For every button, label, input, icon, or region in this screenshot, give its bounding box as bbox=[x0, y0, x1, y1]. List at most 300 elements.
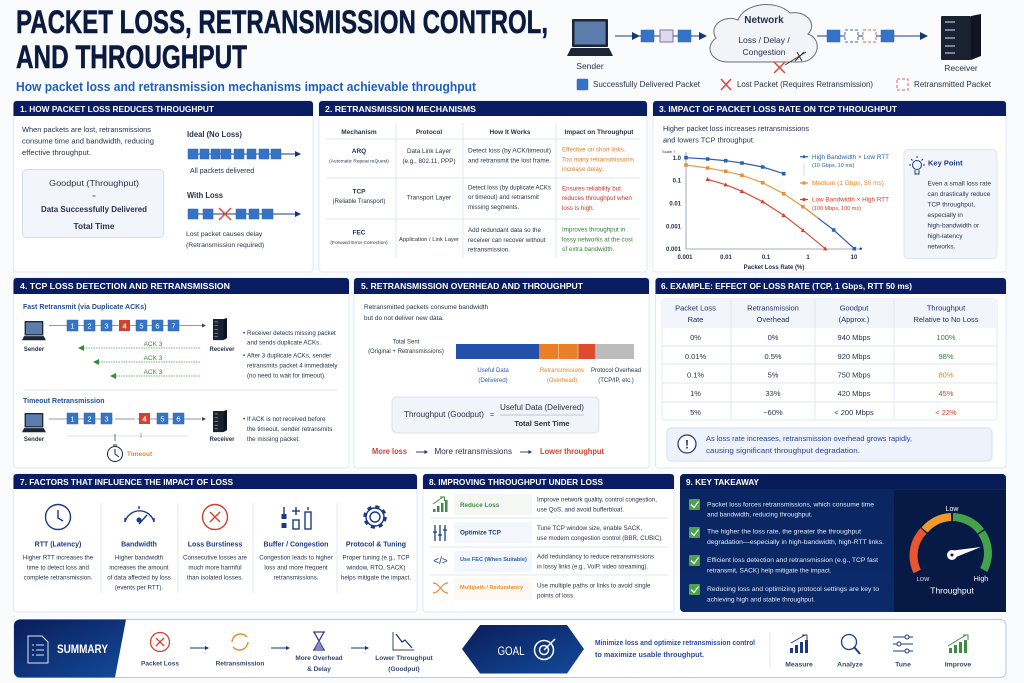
action: improve bbox=[945, 635, 971, 668]
table headers bbox=[341, 129, 634, 136]
title bbox=[16, 4, 548, 75]
icon: timeout clock bbox=[108, 445, 122, 462]
intro text bbox=[663, 126, 810, 144]
goal badge: GOAL bbox=[498, 644, 525, 658]
timeout notes: the missing packet. bbox=[247, 436, 300, 443]
legend: Lost Packet (Requires Retransmission) bbox=[737, 80, 873, 89]
fast retransmit notes: Receiver detects missing packet bbox=[247, 330, 336, 337]
factor: loss burstiness bbox=[183, 504, 248, 582]
action: improve: Improve bbox=[945, 662, 971, 668]
table rows: 80% bbox=[938, 370, 954, 380]
goodput formula box: Total Time bbox=[74, 221, 115, 231]
timeout notes: If ACK is not received before bbox=[247, 416, 326, 423]
results table bbox=[662, 299, 997, 420]
factor: bandwidth: (events per RTT). bbox=[115, 584, 163, 592]
factor: bandwidth bbox=[107, 506, 171, 592]
stacked bar: Useful Data bbox=[477, 368, 509, 374]
line chart: 1 bbox=[806, 255, 810, 261]
ACK arrows: ACK 3 bbox=[144, 341, 163, 348]
fast retransmit notes: After 3 duplicate ACKs, sender bbox=[247, 352, 331, 360]
icon: sender laptop bbox=[567, 19, 613, 56]
line chart: 0.1 bbox=[673, 178, 682, 184]
row: ARQ: ARQ bbox=[352, 148, 366, 155]
factor: loss burstiness: Consecutive losses are bbox=[183, 554, 248, 562]
factor: protocol tuning: Protocol & Tuning bbox=[346, 542, 406, 548]
factor: RTT: Higher RTT increases the bbox=[23, 554, 94, 562]
row: FEC: Add redundant data so the bbox=[468, 227, 541, 234]
timeout notes bbox=[243, 416, 332, 443]
loss chain bbox=[372, 447, 604, 456]
heading 6: 6. EXAMPLE: EFFECT OF LOSS RATE (TCP, 1 Gbps, RTT 50 ms) bbox=[661, 281, 912, 291]
fast retransmit diagram: 1 bbox=[70, 322, 75, 330]
action: measure: Measure bbox=[785, 662, 813, 668]
factor: buffer congestion: Buffer / Congestion bbox=[264, 542, 328, 548]
callout bbox=[667, 428, 992, 461]
intro text bbox=[22, 127, 154, 157]
action: tune: Tune bbox=[895, 662, 911, 668]
fast retransmit notes: and sends duplicate ACKs. bbox=[247, 340, 321, 346]
key point text bbox=[928, 180, 991, 250]
throughput formula: Total Sent Time bbox=[514, 419, 570, 428]
table header: Goodput bbox=[840, 304, 869, 312]
action: analyze bbox=[837, 634, 863, 668]
step: lower throughput: Lower Throughput bbox=[375, 655, 434, 662]
fast retransmit diagram: Fast Retransmit (via Duplicate ACKs) bbox=[23, 304, 146, 311]
fast retransmit diagram: Sender bbox=[24, 347, 45, 353]
row: use FEC: in lossy links (e.g., VoIP, video streaming). bbox=[537, 564, 648, 570]
cloud: network bbox=[710, 5, 817, 62]
table rows: < 200 Mbps bbox=[834, 408, 874, 417]
intro text: Retransmitted packets consume bandwidth bbox=[364, 304, 489, 311]
table rows: 750 Mbps bbox=[838, 370, 871, 380]
panel 6: example table bbox=[656, 278, 1006, 468]
row: ARQ: (e.g., 802.11, PPP) bbox=[402, 158, 456, 165]
factor: loss burstiness: Loss Burstiness bbox=[188, 542, 242, 548]
row: reduce loss: Improve network quality, control congestion, bbox=[537, 496, 657, 504]
packets leaving network bbox=[817, 30, 928, 42]
throughput formula: Useful Data (Delivered) bbox=[500, 403, 584, 412]
summary bar bbox=[14, 620, 1006, 678]
table rows: < 22% bbox=[935, 408, 957, 417]
row: ARQ: increase delay. bbox=[562, 166, 603, 173]
row: optimize TCP: Tune TCP window size, enable SACK, bbox=[537, 525, 642, 532]
callout: causing significant throughput degradation. bbox=[706, 446, 860, 455]
subtitle: How packet loss and retransmission mechanisms impact achievable throughput bbox=[16, 79, 477, 94]
row: ARQ: (Automatic Repeat reQuest) bbox=[329, 158, 389, 164]
row: FEC: of extra bandwidth. bbox=[562, 246, 615, 253]
heading 7: 7. FACTORS THAT INFLUENCE THE IMPACT OF LOSS bbox=[20, 477, 233, 487]
takeaway list: Efficient loss detection and retransmission (e.g., TCP fast bbox=[707, 557, 878, 564]
throughput formula bbox=[392, 397, 599, 433]
goodput formula box: Goodput (Throughput) bbox=[49, 178, 139, 188]
row: use FEC bbox=[433, 551, 654, 572]
row: FEC bbox=[330, 226, 633, 254]
row: optimize TCP: use modern congestion control (BBR, CUBIC). bbox=[537, 535, 663, 542]
series: medium bbox=[684, 163, 818, 218]
line chart: 0.001 bbox=[666, 224, 682, 230]
intro text bbox=[364, 304, 489, 322]
intro text: and lowers TCP throughput. bbox=[663, 138, 755, 144]
arrow bbox=[271, 646, 290, 650]
line chart: 0.1 bbox=[762, 255, 771, 261]
heading 1: 1. HOW PACKET LOSS REDUCES THROUGHPUT bbox=[20, 104, 215, 114]
icon: light bulb bbox=[909, 156, 925, 174]
fast retransmit notes bbox=[243, 330, 338, 380]
timeout retransmission diagram: Timeout bbox=[127, 451, 153, 458]
stacked bar: (Overhead) bbox=[547, 378, 577, 384]
step: more overhead: More Overhead bbox=[295, 655, 343, 662]
sender label: Sender bbox=[576, 61, 604, 71]
line chart: 0.01 bbox=[669, 202, 682, 208]
step: more overhead bbox=[295, 632, 343, 673]
row: TCP: (Reliable Transport) bbox=[333, 199, 385, 205]
timeout retransmission diagram: 4 bbox=[142, 414, 147, 424]
key point text: Even a small loss rate bbox=[928, 180, 991, 188]
panel 9: key takeaway bbox=[680, 474, 1006, 612]
icon: receiver server bbox=[941, 14, 981, 60]
row: reduce loss: Reduce Loss bbox=[460, 502, 500, 509]
loss chain: Lower throughput bbox=[540, 447, 604, 456]
timeout retransmission diagram: Sender bbox=[24, 437, 45, 443]
goal text bbox=[595, 640, 755, 659]
factor: protocol tuning: window, RTO, SACK) bbox=[346, 564, 405, 572]
timeout retransmission diagram: 3 bbox=[104, 414, 109, 424]
timeout retransmission diagram bbox=[22, 398, 332, 462]
packets sent into network bbox=[615, 30, 707, 42]
arrow bbox=[351, 646, 369, 650]
row: TCP: Ensures reliability but bbox=[562, 186, 621, 192]
factor: RTT bbox=[23, 504, 94, 582]
table rows: 98% bbox=[938, 352, 954, 361]
key point text: TCP throughput, bbox=[928, 202, 975, 208]
goal text: Minimize loss and optimize retransmission control bbox=[595, 640, 755, 647]
row: FEC: Application / Link Layer bbox=[399, 237, 459, 243]
table rows: 0.01% bbox=[685, 352, 706, 361]
goal text: to maximize usable throughput. bbox=[595, 652, 704, 659]
fast retransmit diagram: 7 bbox=[171, 322, 176, 330]
table header: Rate bbox=[688, 315, 703, 324]
factor: buffer congestion: loss and more frequent bbox=[264, 564, 328, 572]
stacked bar: (Original + Retransmissions) bbox=[368, 349, 444, 355]
row: TCP: Detect loss (by duplicate ACKs bbox=[468, 184, 551, 192]
line chart: 0.01 bbox=[720, 255, 732, 261]
timeout retransmission diagram: Timeout Retransmission bbox=[23, 398, 105, 405]
ACK arrows bbox=[78, 341, 200, 379]
table header: Retransmission bbox=[747, 304, 799, 312]
row: TCP: missing segments. bbox=[468, 204, 520, 211]
gauge: Throughput bbox=[930, 586, 974, 596]
factor: buffer congestion: Congestion leads to higher bbox=[259, 554, 333, 562]
table rows: 0% bbox=[768, 333, 779, 342]
row: TCP: Transport Layer bbox=[407, 194, 451, 202]
table rows: 420 Mbps bbox=[838, 389, 871, 398]
row: FEC: retransmission. bbox=[468, 246, 510, 254]
gauge: High bbox=[974, 576, 988, 583]
key point text: high-bandwidth or bbox=[928, 222, 980, 230]
callout: ! bbox=[685, 438, 689, 452]
key point text: networks. bbox=[928, 244, 956, 250]
fast retransmit diagram bbox=[22, 304, 338, 380]
ACK arrows: ACK 3 bbox=[144, 355, 163, 362]
key point box: Key Point bbox=[928, 158, 963, 168]
heading 5: 5. RETRANSMISSION OVERHEAD AND THROUGHPUT bbox=[361, 281, 584, 291]
step: retransmission bbox=[216, 634, 264, 668]
row: reduce loss bbox=[433, 494, 657, 515]
cloud: network: Congestion bbox=[742, 47, 786, 57]
chart legend: (100 Mbps, 100 ms) bbox=[812, 206, 861, 212]
heading 9: 9. KEY TAKEAWAY bbox=[686, 477, 759, 487]
gauge bbox=[914, 506, 988, 596]
line chart: Packet Loss Rate (%) bbox=[744, 265, 804, 271]
timeout retransmission diagram: 5 bbox=[160, 414, 165, 424]
fast retransmit diagram: 2 bbox=[87, 322, 92, 330]
takeaway list: degradation—especially in high-bandwidth, high-RTT links. bbox=[707, 539, 884, 546]
intro text: Higher packet loss increases retransmissions bbox=[663, 126, 810, 133]
key point text: high-latency bbox=[928, 233, 963, 240]
factor: bandwidth: increases the amount bbox=[109, 564, 169, 572]
receiver label: Receiver bbox=[944, 63, 978, 73]
row: TCP: loss is high. bbox=[562, 205, 595, 212]
intro text: When packets are lost, retransmissions bbox=[22, 127, 152, 134]
title: AND THROUGHPUT bbox=[16, 39, 247, 75]
table headers: Impact on Throughput bbox=[565, 129, 634, 136]
row: TCP: reduces throughput when bbox=[562, 195, 632, 202]
chart legend bbox=[800, 155, 889, 212]
table rows: 1% bbox=[690, 389, 701, 398]
row: ARQ bbox=[329, 146, 634, 173]
row: use FEC: </> bbox=[433, 556, 448, 567]
factor: bandwidth: of data affected by loss bbox=[107, 574, 171, 582]
row: FEC: receiver can recover without bbox=[468, 237, 546, 244]
stacked bar: Total Sent bbox=[393, 340, 420, 346]
table headers: How It Works bbox=[489, 129, 531, 136]
timeout notes: • bbox=[243, 416, 245, 423]
factor: buffer congestion: retransmissions. bbox=[273, 574, 319, 582]
step: lower throughput bbox=[375, 632, 434, 673]
row: TCP bbox=[333, 184, 632, 212]
ideal packet stream bbox=[187, 129, 301, 175]
intro text: effective throughput. bbox=[22, 150, 91, 157]
fast retransmit diagram: 6 bbox=[155, 322, 160, 330]
timeout retransmission diagram: 2 bbox=[87, 414, 92, 424]
step: lower throughput: (Goodput) bbox=[388, 666, 420, 673]
loss chain: More retransmissions bbox=[434, 447, 512, 456]
row: ARQ: Detect loss (by ACK/timeout) bbox=[468, 148, 551, 154]
factor: protocol tuning: Proper tuning (e.g., TCP bbox=[343, 554, 409, 562]
table rows: 0.5% bbox=[764, 352, 782, 361]
lossy packet stream bbox=[186, 190, 301, 249]
lost packet marks bbox=[774, 52, 806, 73]
step: retransmission: Retransmission bbox=[216, 660, 264, 668]
lossy packet stream: (Retransmission required) bbox=[186, 242, 264, 249]
cloud: network: Loss / Delay / bbox=[738, 35, 790, 45]
row: TCP: or timeout) and retransmit bbox=[468, 194, 539, 201]
panel 5: retransmission overhead bbox=[354, 278, 649, 468]
takeaway list: Reducing loss and optimizing protocol settings are key to bbox=[707, 586, 879, 593]
factor: RTT: time to detect loss and bbox=[27, 564, 90, 572]
chart legend: Low Bandwidth × High RTT bbox=[812, 198, 889, 204]
factor: bandwidth: Higher bandwidth bbox=[115, 554, 164, 562]
table header: (Approx.) bbox=[839, 315, 870, 324]
panel 1: how packet loss reduces throughput bbox=[14, 101, 313, 272]
gauge: Low bbox=[946, 506, 959, 513]
fast retransmit diagram: 3 bbox=[104, 322, 109, 330]
arrow bbox=[190, 646, 209, 650]
table header bbox=[675, 304, 979, 324]
summary label: SUMMARY bbox=[57, 642, 108, 656]
factor: protocol tuning bbox=[341, 507, 411, 582]
row: multipath: Multipath / Redundancy bbox=[460, 585, 524, 591]
line chart: 0.001 bbox=[677, 255, 693, 261]
line chart bbox=[662, 149, 889, 271]
action: analyze: Analyze bbox=[837, 662, 863, 668]
fast retransmit diagram: 5 bbox=[139, 322, 144, 330]
table rows: 0.1% bbox=[687, 370, 704, 380]
table grid bbox=[326, 123, 640, 258]
table rows: ~60% bbox=[763, 408, 783, 417]
throughput formula: = bbox=[490, 412, 494, 419]
key point box bbox=[904, 150, 997, 258]
row: TCP: TCP bbox=[352, 188, 366, 196]
title: PACKET LOSS, RETRANSMISSION CONTROL, bbox=[16, 4, 548, 40]
row: use FEC: Add redundancy to reduce retransmissions bbox=[537, 554, 654, 560]
action: tune bbox=[893, 635, 913, 668]
throughput formula: Throughput (Goodput) bbox=[404, 410, 484, 419]
fast retransmit diagram: Receiver bbox=[209, 347, 235, 353]
stacked bar: (TCP/IP, etc.) bbox=[598, 378, 634, 384]
chart legend: (10 Gbps, 10 ms) bbox=[812, 163, 855, 169]
row: ARQ: Effective on short links. bbox=[562, 146, 626, 154]
row: optimize TCP: Optimize TCP bbox=[460, 530, 501, 536]
intro text: but do not deliver new data. bbox=[364, 315, 444, 322]
cloud: network: Network bbox=[744, 15, 784, 26]
ACK arrows: ACK 3 bbox=[144, 369, 163, 376]
ideal packet stream: All packets delivered bbox=[190, 168, 254, 175]
gauge: LOW bbox=[917, 577, 930, 583]
row: use FEC: Use FEC (When Suitable) bbox=[460, 557, 527, 563]
panel 3: impact of packet loss rate bbox=[653, 101, 1006, 272]
fast retransmit notes: • bbox=[243, 330, 245, 337]
factor: loss burstiness: than isolated losses. bbox=[187, 574, 243, 582]
row: multipath: Use multiple paths or links to avoid single bbox=[537, 582, 651, 590]
row: FEC: lossy networks at the cost bbox=[562, 236, 633, 244]
row: optimize TCP bbox=[433, 522, 663, 543]
row: FEC: FEC bbox=[352, 230, 366, 236]
takeaway list: and bandwidth, reducing throughput. bbox=[707, 512, 813, 518]
lossy packet stream: Lost packet causes delay bbox=[186, 231, 263, 238]
table rows: 5% bbox=[690, 408, 701, 417]
legend: Successfully Delivered Packet bbox=[593, 80, 701, 89]
key point text: can drastically reduce bbox=[928, 191, 991, 198]
heading 8: 8. IMPROVING THROUGHPUT UNDER LOSS bbox=[429, 477, 603, 487]
heading 2: 2. RETRANSMISSION MECHANISMS bbox=[325, 104, 476, 114]
intro text: consume time and bandwidth, reducing bbox=[22, 138, 154, 146]
row: ARQ: Too many retransmissions bbox=[562, 156, 634, 164]
row: ARQ: Data Link Layer bbox=[407, 148, 451, 155]
takeaway list: The higher the loss rate, the greater the throughput bbox=[707, 528, 861, 536]
heading 3: 3. IMPACT OF PACKET LOSS RATE ON TCP THROUGHPUT bbox=[659, 104, 898, 114]
takeaway list: Packet loss forces retransmissions, which consume time bbox=[707, 502, 874, 508]
table rows: 940 Mbps bbox=[838, 333, 871, 342]
stacked bar: Protocol Overhead bbox=[591, 368, 641, 374]
legend: Retransmitted Packet bbox=[914, 80, 992, 89]
chart legend: High Bandwidth × Low RTT bbox=[812, 155, 889, 161]
fast retransmit notes: • bbox=[243, 352, 245, 360]
factor: RTT: complete retransmission. bbox=[24, 574, 93, 582]
key point text: especially in bbox=[928, 212, 963, 219]
factor: loss burstiness: much more harmful bbox=[188, 564, 242, 572]
panel 7: factors bbox=[14, 474, 417, 612]
fast retransmit diagram: 4 bbox=[122, 322, 127, 330]
table headers: Protocol bbox=[416, 129, 442, 136]
loss chain: More loss bbox=[372, 447, 408, 456]
factor: bandwidth: Bandwidth bbox=[121, 542, 157, 548]
table rows: 45% bbox=[938, 389, 954, 398]
ideal packet stream: Ideal (No Loss) bbox=[187, 129, 242, 139]
step: packet loss bbox=[141, 632, 179, 668]
goodput formula box: ≈ bbox=[92, 194, 96, 200]
takeaway list: retransmit, SACK) help mitigate the impact. bbox=[707, 568, 832, 574]
lossy packet stream: With Loss bbox=[187, 190, 223, 200]
goal badge bbox=[462, 625, 584, 674]
row: FEC: (Forward Error Correction) bbox=[330, 240, 388, 246]
line chart: Scale ↑ bbox=[662, 149, 675, 154]
panel 4: TCP loss detection bbox=[14, 278, 349, 468]
chart legend: Medium (1 Gbps, 50 ms) bbox=[812, 181, 884, 187]
goodput formula box: Data Successfully Delivered bbox=[41, 204, 147, 214]
row: multipath bbox=[433, 578, 651, 600]
timeout retransmission diagram: 1 bbox=[70, 414, 75, 424]
table rows: 100% bbox=[936, 333, 956, 342]
factor: buffer congestion bbox=[259, 507, 333, 582]
row: FEC: Improves throughput in bbox=[562, 226, 626, 234]
fast retransmit notes: (no need to wait for timeout). bbox=[247, 372, 326, 380]
takeaway list bbox=[689, 499, 884, 604]
table headers: Mechanism bbox=[341, 129, 377, 136]
timeout notes: the timeout, sender retransmits bbox=[247, 426, 332, 433]
table header: Packet Loss bbox=[675, 304, 716, 312]
panel 8: improving throughput bbox=[423, 474, 674, 612]
table rows: 0% bbox=[690, 333, 701, 342]
takeaway list: achieving high and stable throughput. bbox=[707, 596, 815, 604]
series: high bandwidth low RTT bbox=[684, 156, 862, 250]
line chart: 10 bbox=[851, 255, 858, 261]
panel 2: retransmission mechanisms bbox=[319, 101, 647, 272]
table header: Relative to No Loss bbox=[913, 315, 979, 324]
table header: Throughput bbox=[927, 304, 966, 312]
heading 4: 4. TCP LOSS DETECTION AND RETRANSMISSION bbox=[20, 281, 230, 291]
row: multipath: points of loss. bbox=[537, 592, 575, 600]
action: measure bbox=[785, 635, 813, 668]
table rows: 33% bbox=[765, 389, 781, 398]
factor: RTT: RTT (Latency) bbox=[35, 542, 81, 548]
goodput formula box bbox=[22, 170, 164, 238]
step: packet loss: Packet Loss bbox=[141, 660, 179, 668]
row: ARQ: and retransmit the lost frame. bbox=[468, 158, 551, 164]
line chart: 0.001 bbox=[666, 247, 682, 253]
timeout retransmission diagram: 6 bbox=[176, 414, 181, 424]
factor: protocol tuning: helps mitigate the impact. bbox=[341, 574, 411, 582]
table header: Overhead bbox=[757, 315, 789, 324]
fast retransmit notes: retransmits packet 4 immediately bbox=[247, 362, 338, 370]
series: low bandwidth high RTT bbox=[706, 177, 828, 250]
legend bbox=[577, 79, 992, 90]
stacked bar: Retransmissions bbox=[540, 368, 584, 374]
line chart: 1.0 bbox=[673, 156, 682, 162]
table rows: 920 Mbps bbox=[838, 352, 871, 361]
timeout retransmission diagram: Receiver bbox=[209, 437, 235, 443]
summary label bbox=[14, 620, 126, 678]
